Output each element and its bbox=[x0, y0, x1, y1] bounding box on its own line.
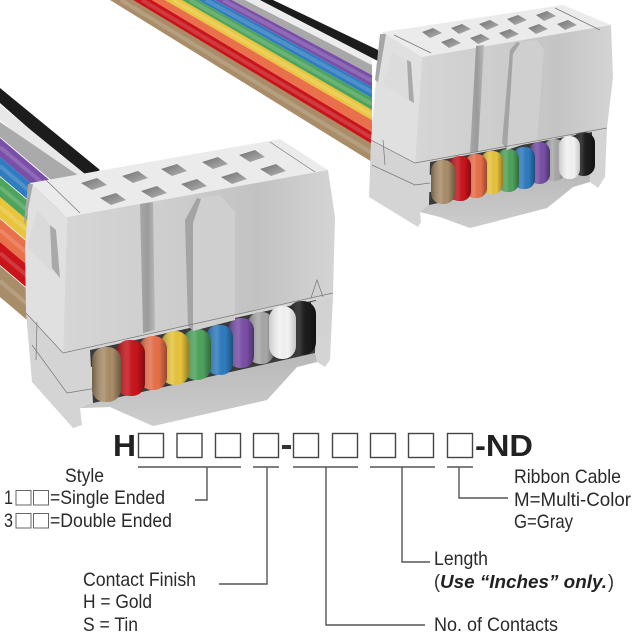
label: length: Length bbox=[434, 548, 488, 570]
top face bbox=[30, 139, 328, 217]
part number code bbox=[113, 428, 533, 463]
label: style: Style bbox=[65, 465, 104, 487]
bracket lines bbox=[138, 467, 508, 625]
side latch bbox=[375, 34, 414, 103]
label: ribbon cable: Ribbon Cable bbox=[514, 466, 621, 488]
coils bbox=[92, 301, 316, 402]
label: style: =Double Ended bbox=[50, 510, 172, 532]
contact holes bbox=[81, 150, 286, 205]
polarizing tab bbox=[502, 40, 544, 150]
front face bbox=[415, 25, 613, 163]
label: length: ) bbox=[608, 571, 614, 593]
label: style: 1 bbox=[4, 487, 13, 509]
label: contact finish: Contact Finish bbox=[83, 569, 196, 591]
lower housing bbox=[26, 293, 333, 428]
front face bbox=[63, 170, 335, 353]
label: ribbon cable: G=Gray bbox=[514, 511, 573, 533]
ribbon cable: lower left connector bbox=[0, 88, 100, 348]
left side face bbox=[25, 183, 67, 353]
label: ribbon cable bbox=[514, 466, 631, 533]
connector: left, large bbox=[24, 139, 335, 428]
separator dash bbox=[282, 445, 291, 449]
label: length bbox=[434, 548, 614, 593]
lobe shading bbox=[80, 353, 317, 426]
connector: right, small bbox=[369, 5, 613, 228]
coils bbox=[431, 132, 595, 204]
left side face bbox=[371, 32, 422, 163]
polarizing tab bbox=[185, 195, 235, 331]
label: ribbon cable: M=Multi-Color bbox=[514, 489, 631, 511]
cable window bbox=[429, 132, 592, 205]
top face bbox=[383, 5, 611, 57]
cable window bbox=[90, 300, 316, 403]
label: contact finish: H = Gold bbox=[83, 591, 152, 613]
code boxes bbox=[138, 434, 472, 458]
label: number of contacts: No. of Contacts bbox=[434, 614, 558, 636]
suffix ND: -ND bbox=[475, 428, 533, 463]
label: length: Use “Inches” only. bbox=[440, 572, 607, 592]
label: style: =Single Ended bbox=[50, 487, 165, 509]
edge lines bbox=[371, 8, 607, 185]
label: length: ( bbox=[434, 571, 440, 593]
label: contact finish bbox=[83, 569, 196, 636]
lower housing bbox=[369, 128, 607, 228]
label: style: 3 bbox=[4, 510, 13, 532]
ribbon cable: upper right connector bbox=[110, 0, 378, 162]
guide slot bbox=[140, 202, 155, 333]
guide slot bbox=[470, 45, 484, 153]
edge lines bbox=[26, 142, 333, 393]
contact holes bbox=[422, 11, 577, 48]
label: style bbox=[4, 465, 172, 532]
side latch bbox=[24, 184, 60, 278]
label: contact finish: S = Tin bbox=[83, 614, 138, 636]
prefix H: H bbox=[113, 428, 136, 463]
lobe shading bbox=[420, 170, 590, 228]
